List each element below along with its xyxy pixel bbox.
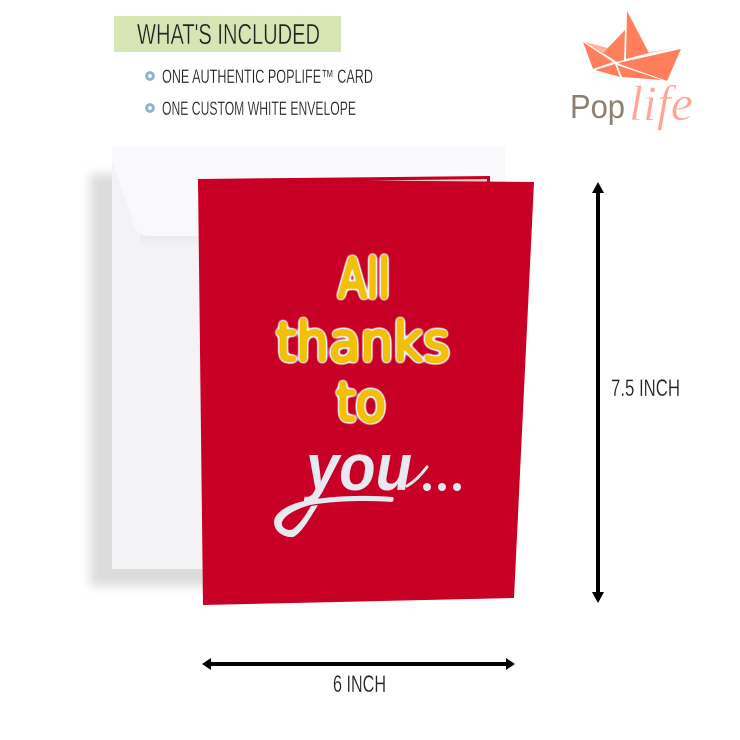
card text: to: to (336, 370, 386, 434)
label: 6 inch: 6 INCH (333, 671, 386, 698)
card text: thanks: thanks (276, 310, 450, 374)
list item: card (147, 67, 373, 88)
card back edge (198, 176, 490, 186)
card text: All: All (338, 247, 390, 312)
arrow: height dimension (592, 182, 604, 603)
wordmark: Pop: Pop (570, 88, 625, 125)
list item: card: ONE AUTHENTIC POPLIFE™ CARD (162, 67, 373, 88)
logo: Poplife (570, 11, 693, 131)
envelope with shadow (90, 146, 505, 586)
envelope shadow (90, 174, 220, 586)
card front (198, 179, 534, 605)
wordmark: life: life (629, 75, 693, 131)
list item: envelope (147, 99, 356, 120)
greeting card (198, 176, 534, 605)
card text: you (274, 430, 461, 537)
heading: what's included: WHAT'S INCLUDED (137, 19, 320, 51)
envelope flap (112, 146, 505, 236)
list item: envelope: ONE CUSTOM WHITE ENVELOPE (162, 99, 356, 120)
card inner strip (330, 179, 487, 183)
card text: you: you (303, 430, 412, 504)
arrow: width dimension (202, 658, 515, 670)
envelope body (112, 146, 505, 569)
heading: what's included (114, 16, 341, 52)
envelope flap shadow (140, 234, 210, 246)
panel: what's included (114, 16, 373, 120)
icon: origami boat (583, 11, 681, 81)
label: 7.5 inch: 7.5 INCH (611, 375, 680, 402)
